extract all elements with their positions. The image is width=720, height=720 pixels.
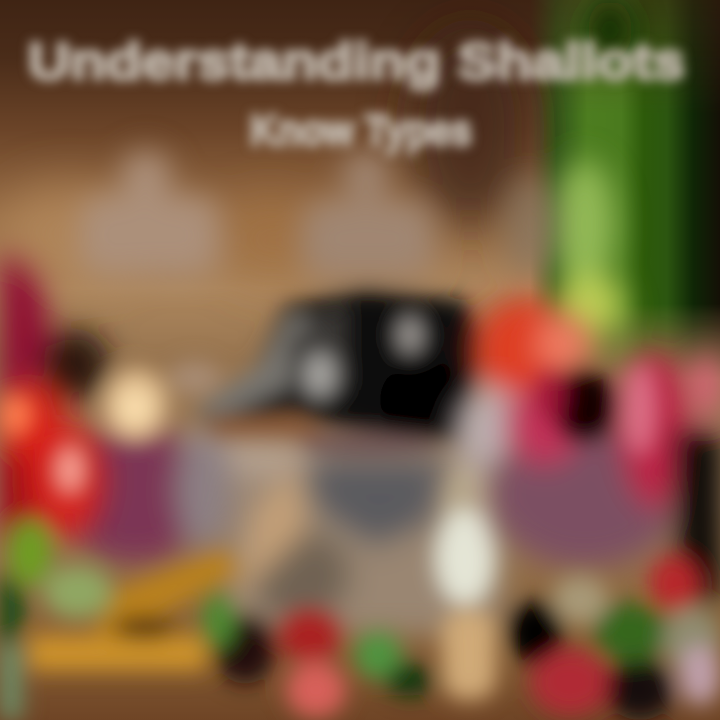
right background haze [504,175,556,275]
glass bowl center [175,433,505,635]
brim shadow [205,412,440,457]
red pepper right [454,298,593,472]
white garlic clove [435,460,495,606]
green vegetable backdrop [530,0,720,380]
metal blade [305,462,445,545]
tomatoes left [0,255,109,542]
cream piece [552,576,608,624]
green herb bottom [354,631,434,696]
onion highlights [536,364,656,456]
green highlights [555,0,632,335]
orange sticks [28,548,240,671]
dark backdrop [41,329,109,401]
dark berry [507,600,563,664]
title line 1: Understanding Shallots [28,33,685,91]
ghost icon: left [80,151,220,275]
red onion right [490,352,689,567]
dark right edge [680,353,720,600]
background shading [0,30,530,285]
red onion left [60,427,233,563]
black hat shape [195,288,482,440]
tomato highlights [0,395,84,494]
red radishes bottom [278,609,346,718]
ghost icon: center [302,151,434,278]
tan stick [442,610,496,700]
cream garlic [103,362,221,441]
title [28,33,685,155]
right garnish [530,555,720,720]
title line 2: Know Types [250,106,472,155]
center green and dark [202,592,275,684]
left greens [0,518,112,720]
